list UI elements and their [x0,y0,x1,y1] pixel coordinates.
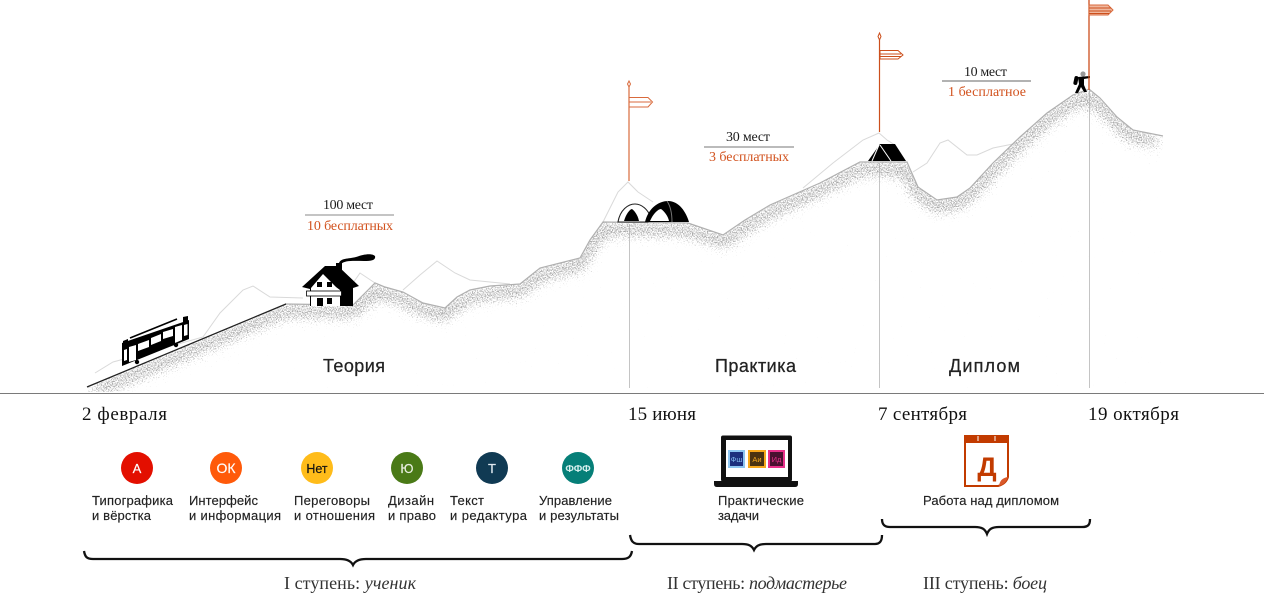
icon: laptop: Фш [731,455,742,464]
capacity: практика [704,130,794,165]
course: типографика [92,452,174,523]
mountain ridge line [285,89,1163,308]
label: работа над дипломом: Работа над дипломом [923,493,1059,508]
course: управление: ФФФ [565,464,591,475]
course: дизайн: Дизайн [388,493,434,508]
timeline axis [0,392,1264,394]
capacity: диплом: 10 мест [964,65,1007,80]
course: переговоры: Переговоры [294,493,370,508]
course: интерфейс [189,452,281,523]
course: дизайн [388,452,436,523]
course: управление [539,452,619,523]
course: переговоры [294,452,375,523]
section label: Практика: Практика [715,356,797,376]
course: интерфейс: ОК [216,460,236,476]
date: 15 июня: 15 июня [628,404,696,425]
background mountain outline [95,133,1013,373]
icon: laptop: Аи [752,455,762,464]
icon: calendar: Д [977,452,997,482]
icon: laptop [714,436,798,487]
capacity: диплом [942,65,1031,100]
brace: I ступень [84,551,632,565]
date: 19 октября: 19 октября [1088,404,1179,425]
label: практические задачи: задачи [718,508,759,523]
railway line [87,304,286,387]
brace: II ступень [630,535,882,550]
icon: tram [122,316,189,366]
course: переговоры: и отношения [294,508,375,523]
icon: calendar [964,435,1009,486]
course: интерфейс: и информация [189,508,281,523]
course: управление: Управление [539,493,612,508]
section label: Теория: Теория [323,356,385,376]
course: текст: и редактура [450,508,528,523]
brace: III ступень [882,519,1090,534]
icon: small dome tent [618,204,650,222]
step: I ступень: I ступень: ученик [284,573,417,593]
course: интерфейс: Интерфейс [189,493,258,508]
course: переговоры: Нет [306,462,328,476]
capacity: теория: 100 мест [323,198,373,213]
label: практические задачи [718,493,804,523]
icon: large dome tent [645,201,689,222]
flag: 15 июня [628,81,652,181]
label: практические задачи: Практические [718,493,804,508]
date: 2 февраля: 2 февраля [82,404,167,425]
step: III ступень: III ступень: боец [923,573,1047,593]
stippled mountain slope [88,96,1163,394]
capacity: теория: 10 бесплатных [307,219,393,234]
course: текст [450,452,528,523]
capacity: диплом: 1 бесплатное [948,85,1026,100]
flag: 7 сентября [878,33,903,132]
icon: ridge tent [868,144,906,161]
course: типографика: Типографика [92,493,174,508]
course: типографика: А [133,461,142,476]
capacity: практика: 30 мест [726,130,770,145]
course: дизайн: и право [388,508,436,523]
step: II ступень: II ступень: подмастерье [667,573,847,593]
course: управление: и результаты [539,508,619,523]
flag: 19 октября [1089,0,1113,90]
section label: Диплом: Диплом [949,356,1020,376]
icon: laptop: Ид [772,455,782,464]
date: 7 сентября: 7 сентября [878,404,967,425]
course: текст: Т [488,461,496,476]
capacity: практика: 3 бесплатных [709,150,789,165]
course: типографика: и вёрстка [92,508,152,523]
vertical milestone lines [630,90,1090,388]
icon: hiker [1073,71,1090,93]
icon: house [302,254,375,306]
course: текст: Текст [450,493,484,508]
capacity: теория [305,198,394,234]
course: дизайн: Ю [400,461,414,476]
